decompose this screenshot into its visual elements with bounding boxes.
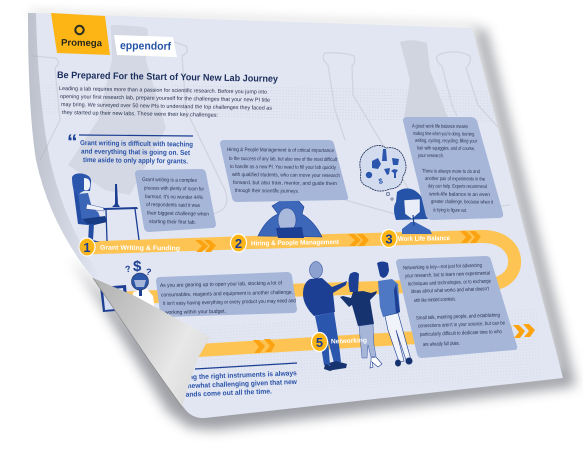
- title: Be Prepared For the Start of Your New Lab Journey: [57, 70, 279, 85]
- chevrons: row one: [195, 231, 481, 252]
- intro paragraph: they started up their new labs. These were their key challenges:: [62, 110, 218, 119]
- panel: networking: [396, 256, 517, 358]
- icon: stressed man: [258, 198, 322, 238]
- step 2: hiring label: Hiring & People Management: [251, 239, 340, 247]
- panel: networking: Small talk, meeting people, and establishing: [416, 313, 500, 321]
- pull quote: grant writing: time aside to only apply for grants.: [83, 157, 188, 165]
- panel: networking: with like-minded scientists.: [414, 297, 456, 304]
- pull quote: grant writing: “: [67, 131, 78, 154]
- panel: consumables: consumables, reagents and equipment is another challenge.: [161, 290, 293, 298]
- flask: outline middle: [323, 53, 414, 214]
- panel: work life balance: greater challenge, because when it: [431, 199, 493, 206]
- flask: dark left: [68, 25, 166, 195]
- panel: grant writing: burnout. It's no wonder 44%: [145, 194, 203, 201]
- dark column: [400, 40, 448, 118]
- panel: hiring: with qualified students, who can move your research: [232, 172, 340, 179]
- pull quote: grant writing: [67, 131, 193, 165]
- panel: grant writing: process with plenty of room for: [144, 186, 204, 193]
- icon: scientist with questions: ?: [124, 264, 132, 274]
- step 1: grant writing label: Grant Writing & Funding: [100, 245, 180, 252]
- panel: hiring: to handle as a new PI. You need to fill your lab quickly: [230, 164, 336, 171]
- intro paragraph: may bring. We surveyed over 50 new PIs to understand the top challenges they faced as: [61, 102, 272, 112]
- panel: networking: your research, but to learn new experimental: [405, 271, 490, 279]
- panel: networking: techniques and technologies, or to exchange: [408, 279, 491, 287]
- logo: Promega: [51, 13, 110, 55]
- panel: hiring: [220, 140, 348, 202]
- panel: networking: are already full plate.: [423, 341, 460, 348]
- step 2: hiring label: [230, 234, 340, 252]
- pull quote: instruments: brands come out all the time.: [179, 388, 272, 399]
- pull quote: grant writing: and everything that is going on. Set: [81, 149, 191, 157]
- logo: eppendorf: [114, 35, 177, 57]
- intro paragraph: Leading a lab requires more than a passion for scientific research. Before you jump into: [59, 86, 267, 96]
- panel: grant writing: their biggest challenge when: [147, 211, 209, 218]
- panel: grant writing: [135, 169, 216, 232]
- intro paragraph: opening your first research lab, prepare yourself for the challenges that your new PI title: [60, 94, 270, 104]
- icon: scientist with questions: $: [133, 258, 142, 275]
- step 3: work life label: Work Life Balance: [398, 235, 450, 243]
- step 3: work life label: 3: [385, 232, 393, 246]
- panel: grant writing: Grant writing is a complex: [142, 177, 197, 184]
- panel: work life balance: your research.: [418, 153, 444, 159]
- step 5: networking label: Networking: [331, 337, 367, 345]
- panel: work life balance: There is always more to do and: [422, 169, 480, 175]
- panel: grant writing: starting their first lab.: [149, 219, 196, 226]
- icon: networking people: [303, 262, 412, 371]
- icon: thinking woman: [394, 188, 432, 234]
- step 3: work life label: [381, 230, 450, 248]
- flask: outline left: [32, 42, 227, 218]
- panel: consumables: As you are gearing up to open your lab, stocking a lot of: [160, 280, 283, 289]
- pull quote: instruments: somewhat challenging given that new: [178, 379, 298, 390]
- left edge shading: [28, 13, 100, 278]
- icon: woman at desk: [72, 173, 139, 242]
- logo: eppendorf: eppendorf: [120, 40, 171, 53]
- pull quote: grant writing: Grant writing is difficult with teaching: [80, 140, 193, 149]
- logo: Promega: Promega: [61, 38, 103, 48]
- road: journey path: [85, 236, 515, 351]
- panel: consumables: It isn't easy having everything or every product you may need and: [163, 298, 296, 307]
- panel: work life balance: is trying to figure out.: [433, 208, 467, 214]
- panel: work life balance: writing, cycling, recycling, filling your: [415, 138, 477, 145]
- panel: work life balance: making time when you're doing, learning,: [413, 131, 475, 138]
- pull quote: instruments: Finding the right instruments is always: [173, 370, 297, 382]
- panel: hiring: Hiring & People Management is of critical importance: [227, 147, 334, 154]
- panel: networking: connections aren't in your science, but can be: [418, 320, 505, 329]
- panel: hiring: forward, but also train, mentor, and guide them: [233, 180, 337, 187]
- panel: work life balance: hair with squiggles, and of course,: [417, 146, 475, 152]
- icon: scientist with questions: ?: [145, 267, 152, 277]
- panel: consumables: [156, 272, 297, 317]
- panel: work life balance: day can help. Experts recommend: [428, 184, 487, 190]
- chevrons: row three: [253, 324, 535, 353]
- person one: [303, 262, 347, 371]
- panel: hiring: through their scientific journeys.: [235, 188, 299, 195]
- panel: networking: ideas about what works and what doesn't: [411, 286, 489, 295]
- panel: networking: particularly difficult to dedicate time to who: [420, 329, 502, 338]
- step 2: hiring label: 2: [235, 236, 242, 251]
- step 5: networking label: [312, 332, 367, 352]
- person three: [377, 262, 412, 366]
- panel: grant writing: of respondents said it was: [146, 202, 200, 209]
- icon: scientist with questions: [100, 258, 155, 312]
- background: flasks and dots: [30, 25, 542, 396]
- page curl fold: [93, 278, 210, 407]
- panel: work life balance: work-life balance is an even: [429, 192, 490, 198]
- icon: thought bubble: [360, 145, 406, 200]
- icon: thought bubble: $: [378, 176, 384, 186]
- panel: work life balance: A good work life balance means: [412, 124, 468, 130]
- step 5: networking label: 5: [316, 335, 323, 350]
- panel: networking: Networking is key—not just for advancing: [403, 263, 482, 271]
- flask: outline right: [436, 51, 510, 206]
- panel: work life balance: another pair of experiments in the: [425, 176, 485, 183]
- panel: consumables: working within your budget.: [165, 309, 226, 316]
- step 1: grant writing label: 1: [83, 240, 91, 255]
- step 1: grant writing label: [79, 238, 180, 256]
- panel: hiring: to the success of any lab, but also one of the most difficult: [229, 156, 337, 163]
- panel: work life balance: [403, 117, 503, 220]
- person two: [340, 272, 382, 368]
- intro paragraph: [59, 86, 272, 119]
- pull quote: instruments: [173, 363, 298, 399]
